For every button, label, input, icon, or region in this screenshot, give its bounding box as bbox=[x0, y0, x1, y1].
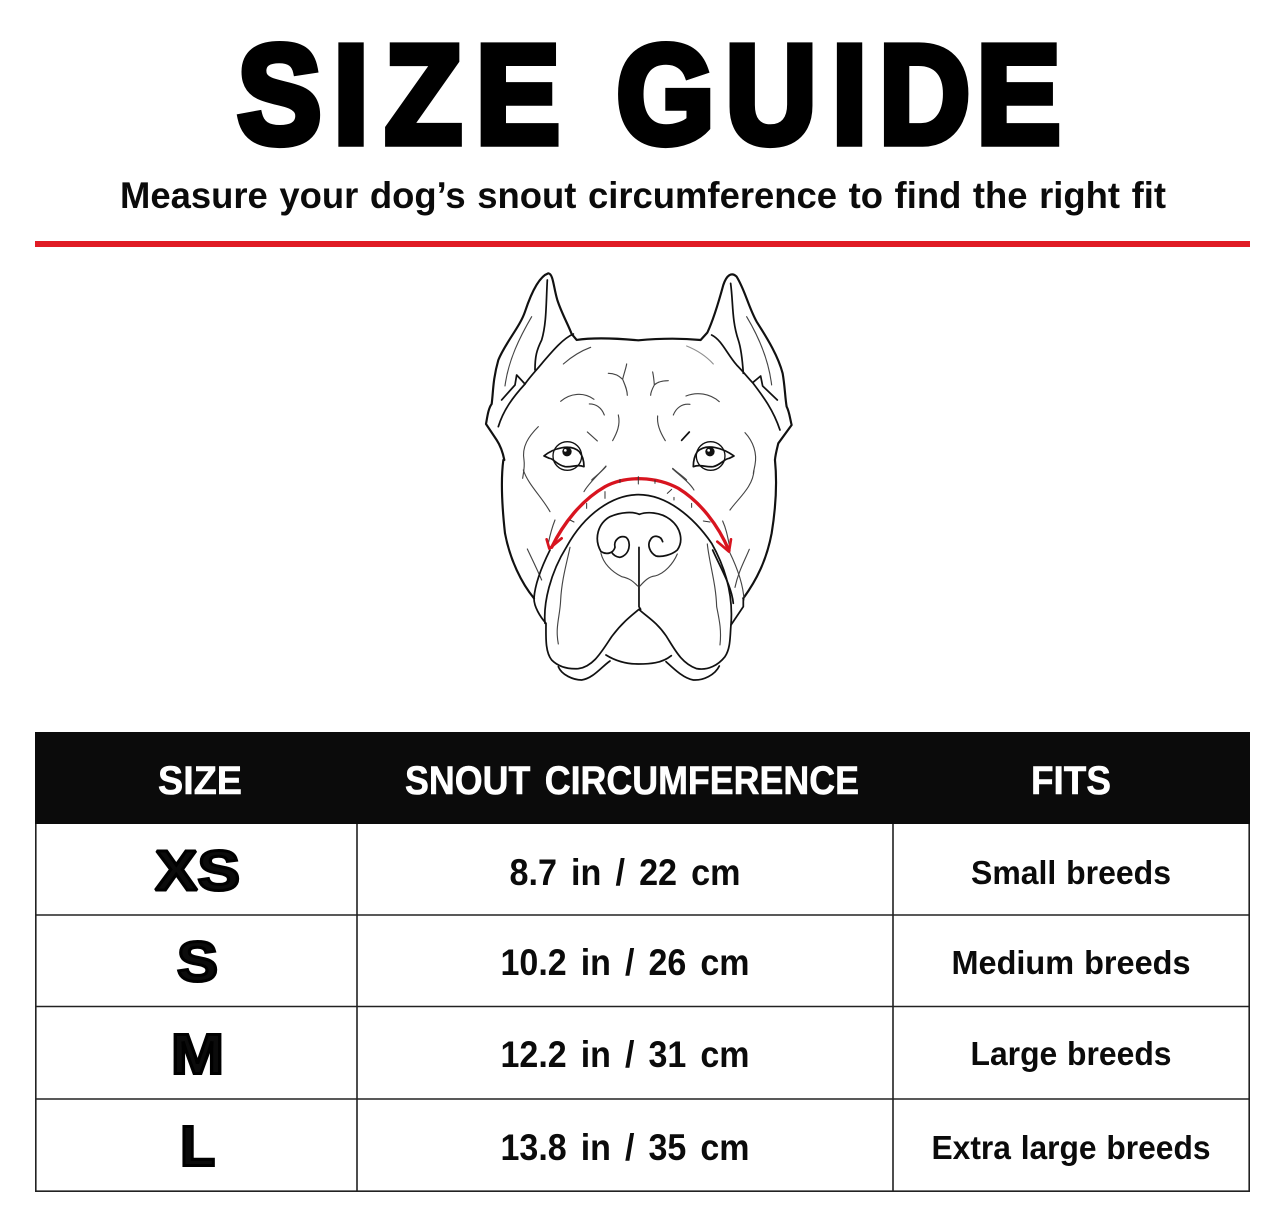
row L: Extra large breeds bbox=[932, 1129, 1210, 1166]
dog head upper bbox=[486, 273, 792, 480]
row L: 13.8 in / 35 cm bbox=[500, 1127, 750, 1168]
table grid bbox=[35, 824, 1250, 1192]
row M: Large breeds bbox=[970, 1035, 1172, 1072]
row M: M bbox=[171, 1022, 224, 1086]
row XS bbox=[155, 839, 1171, 903]
row XS: XS bbox=[155, 839, 240, 903]
row S: 10.2 in / 26 cm bbox=[500, 942, 750, 983]
table header: FITS bbox=[1031, 759, 1111, 803]
size table bbox=[35, 732, 1250, 1192]
row S: Medium breeds bbox=[952, 944, 1190, 981]
table header: SIZE bbox=[158, 759, 242, 803]
row XS: 8.7 in / 22 cm bbox=[510, 852, 740, 893]
muzzle bbox=[545, 495, 731, 625]
title: SIZE GUIDE bbox=[237, 17, 1061, 173]
row M: 12.2 in / 31 cm bbox=[500, 1034, 750, 1075]
red divider bbox=[35, 241, 1250, 247]
row L bbox=[180, 1114, 1211, 1178]
dog head lower bbox=[502, 460, 776, 680]
subtitle: Measure your dog’s snout circumference to find the right fit bbox=[120, 174, 1166, 216]
right eye bbox=[693, 442, 734, 470]
table header bbox=[35, 732, 1250, 824]
row M bbox=[171, 1022, 1172, 1086]
row S bbox=[177, 930, 1190, 994]
left eye bbox=[544, 442, 584, 470]
icon: dog head with snout measurement bbox=[486, 273, 792, 680]
row S: S bbox=[177, 930, 218, 994]
nose bbox=[597, 513, 681, 609]
red measuring arrow bbox=[547, 477, 731, 552]
row XS: Small breeds bbox=[971, 854, 1171, 891]
table header: SNOUT CIRCUMFERENCE bbox=[405, 759, 859, 803]
row L: L bbox=[180, 1114, 215, 1178]
